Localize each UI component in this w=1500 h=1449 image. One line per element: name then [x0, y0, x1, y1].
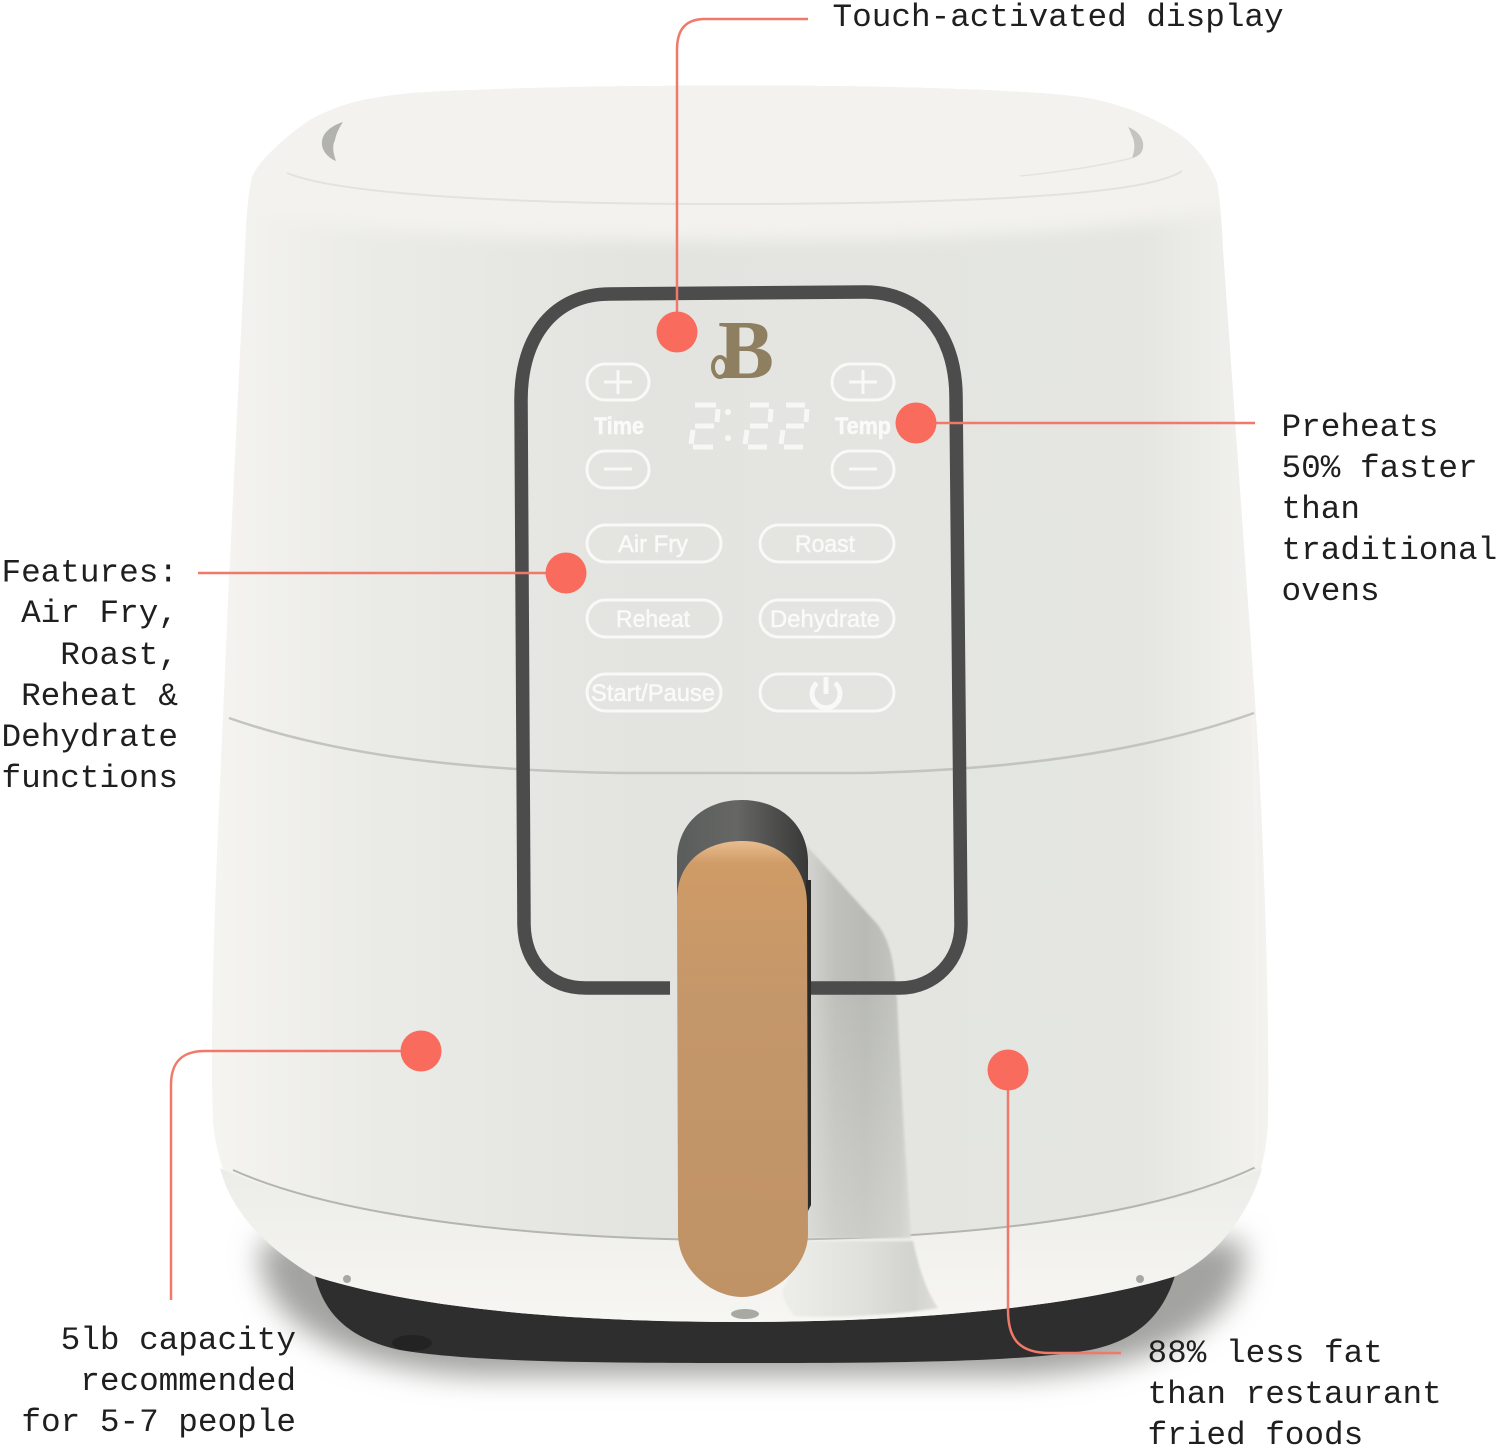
temp minus button	[832, 451, 894, 488]
display frame	[521, 292, 961, 988]
callout: preheats	[896, 402, 1497, 610]
drawer seam	[229, 713, 1254, 773]
callout: less fat: 88% less fat	[1148, 1335, 1383, 1372]
start pause button: Start/Pause	[591, 680, 715, 707]
lid edge curve	[287, 171, 1182, 204]
digital display 2:22	[691, 405, 807, 447]
shoulder band	[362, 86, 1196, 240]
time plus button	[587, 364, 649, 400]
callout: features: Air Fry,	[21, 595, 178, 632]
main body	[212, 86, 1268, 1322]
lid right notch	[1128, 127, 1143, 158]
floor shadow	[261, 1240, 1244, 1376]
handle mount	[677, 800, 808, 900]
air fry button: Air Fry	[618, 531, 688, 558]
lid left notch	[322, 122, 343, 161]
callout: features: Features:	[1, 554, 178, 592]
handle cast shadow	[806, 845, 911, 1238]
air fry button	[587, 525, 721, 562]
lower trim seam	[233, 1167, 1256, 1240]
dehydrate button	[760, 600, 894, 637]
callout: touch-activated display: Touch-activated display	[832, 0, 1284, 36]
roast button: Roast	[795, 531, 855, 558]
drawer right edge	[1253, 715, 1257, 1168]
callout: capacity: recommended	[80, 1363, 296, 1400]
vent hole center	[729, 1300, 761, 1319]
roast button	[760, 525, 894, 562]
callout: features: Dehydrate	[1, 719, 178, 756]
dark base	[314, 1272, 1176, 1363]
callout: preheats: 50% faster	[1282, 450, 1478, 487]
brand logo B: B	[718, 304, 774, 397]
dehydrate button: Dehydrate	[770, 606, 880, 633]
control panel	[587, 304, 894, 711]
lid plate lower edge	[1020, 158, 1132, 176]
callout: features	[1, 552, 586, 797]
reheat button: Reheat	[616, 606, 690, 633]
callout: capacity: for 5-7 people	[21, 1404, 296, 1441]
vent hole left side	[343, 1275, 351, 1283]
callout: capacity	[21, 1030, 442, 1441]
time label: Time	[594, 413, 644, 440]
reheat button	[587, 600, 721, 637]
callout: preheats: ovens	[1282, 573, 1380, 610]
handle shadow fade	[808, 1000, 911, 1238]
callout: capacity: 5lb capacity	[61, 1322, 296, 1359]
temp label: Temp	[835, 413, 891, 440]
callout: features: functions	[1, 760, 178, 797]
callout: preheats: traditional	[1282, 532, 1497, 569]
temp plus button	[832, 364, 894, 400]
callout: features: Reheat &	[21, 678, 178, 715]
power button	[760, 674, 894, 711]
air fryer product illustration	[212, 70, 1268, 1363]
copper handle	[677, 841, 808, 1297]
callout: preheats: than	[1282, 491, 1360, 528]
handle lower shadow	[783, 1241, 938, 1317]
lower trim band	[220, 1168, 1262, 1322]
callout: less fat: than restaurant	[1148, 1376, 1442, 1413]
vent hole right side	[1136, 1275, 1144, 1283]
callout: less fat	[988, 1050, 1442, 1449]
callout: preheats: Preheats	[1282, 409, 1438, 446]
start pause button	[587, 674, 721, 711]
time minus button	[587, 451, 649, 488]
handle dark edge	[806, 880, 811, 1215]
callout: features: Roast,	[60, 637, 178, 674]
callout: touch-activated display	[656, 0, 1284, 352]
rubber foot	[392, 1335, 432, 1351]
